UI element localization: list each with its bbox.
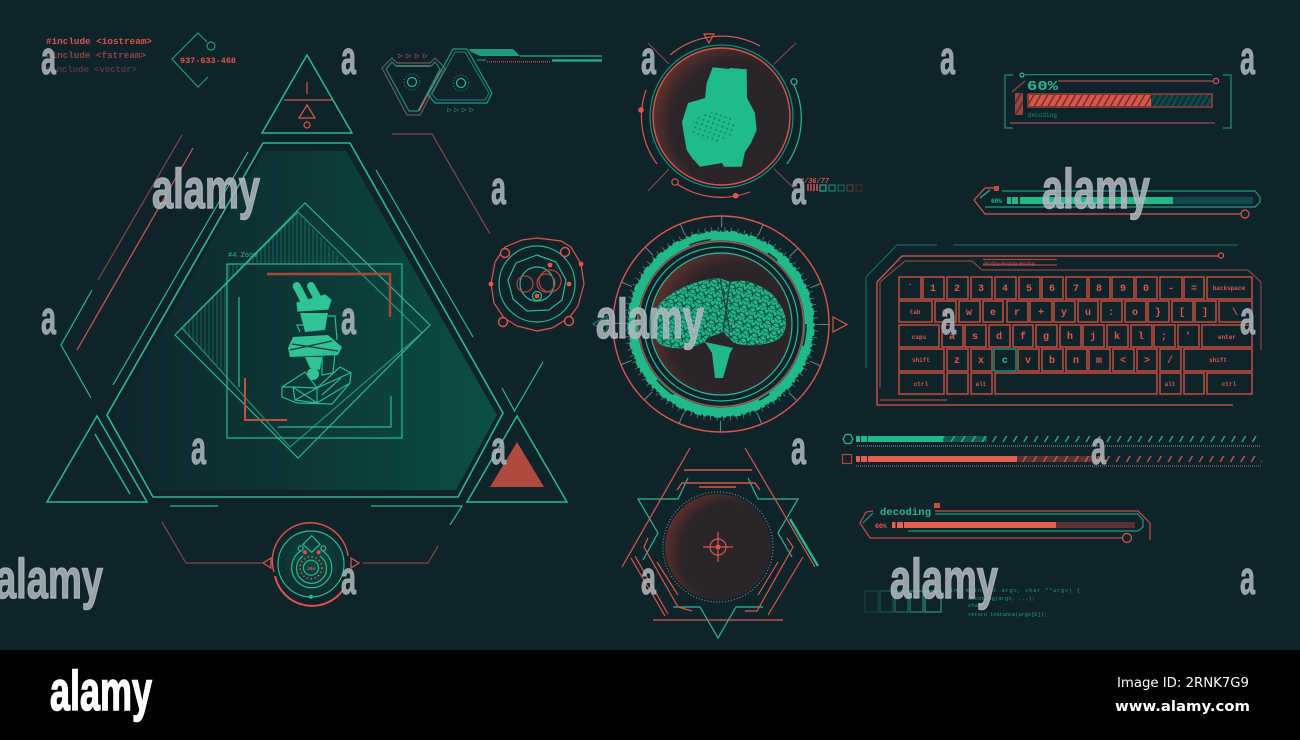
key legends: y [1061,308,1067,319]
key legends: < [1120,356,1126,367]
key legends: w [966,308,972,319]
panel: twin triangle badges [382,49,602,115]
badge left: ▷▷▷▷ [398,52,428,61]
corner brackets [239,274,391,427]
key legends: k [1114,331,1120,343]
key legends: shift [1209,357,1227,364]
tick marks [619,222,823,426]
watermark letters [41,31,1255,604]
decoding title: decoding [880,507,931,519]
footer bar [0,650,1300,740]
rings [499,246,575,322]
badge left [382,52,445,115]
key legends: 9 [1120,284,1126,295]
panel: orbit dial [489,238,584,331]
watermark words: alamy [1042,157,1150,220]
watermark letters: a [341,291,356,344]
stage [288,335,342,357]
key legends: ] [1202,307,1208,319]
key legends: alt [976,381,987,388]
target disc [665,494,771,600]
key legends: n [1073,356,1079,367]
key legends: e [990,308,996,319]
left chevron [61,290,92,398]
panel: diamond tag [172,33,236,87]
panel: green progress widget [974,186,1260,218]
caption: decoding [1028,112,1057,119]
percent: 60% [1027,79,1059,95]
panel: fading squares [865,591,941,612]
key legends: [ [1179,307,1185,319]
badge right: ▷▷▷▷ [447,106,474,115]
watermark letters: a [1240,291,1255,344]
watermark letters: a [41,291,56,344]
footer logo: alamy [50,659,152,722]
key legends: c [1002,356,1008,367]
key legends: = [1191,284,1197,295]
keyboard frame: decoding-decoding-decoding [983,261,1035,267]
parallel accent lines [113,152,473,525]
key legends: j [1090,331,1096,343]
key legends: l [1138,331,1144,343]
inner details [292,536,332,588]
panel: top brain-stem scan dial [638,34,862,198]
hatch block [1015,93,1023,115]
bar [1028,94,1212,107]
key legends: m [1096,356,1102,367]
watermark words [0,157,1150,610]
nodes [498,248,574,326]
rectangle frame [227,264,402,438]
panel: lower left triangle [47,416,147,502]
key legends: d [996,331,1002,343]
circuit lines [469,49,602,62]
overlapping orbits [517,270,561,292]
green accent [790,519,818,566]
diagonal ticks [648,43,796,191]
key legends: ctrl [914,381,929,388]
key legends: 2 [954,284,960,295]
key legends: - [1168,284,1174,295]
brain [653,278,786,378]
connector lines [162,522,438,563]
red accent lines [77,134,490,350]
key legends: / [1167,355,1173,367]
icon: microscope wireframe [282,286,351,404]
panel: bottom code text: return instance(argv[0]); [968,611,1047,618]
key legends: } [1155,307,1161,319]
watermark letters: a [191,421,206,474]
watermark words: alamy [596,287,704,350]
key legends: 3 [978,284,984,295]
watermark words: alamy [890,547,998,610]
panel: top right progress widget [1005,73,1231,128]
red triangle [490,442,544,487]
watermark letters: a [791,161,806,214]
triangle markers [284,82,332,128]
panel: large hexagon microscope display [61,134,503,525]
watermark letters: a [491,161,506,214]
image id: Image ID: 2RNK7G9 [1117,676,1249,691]
specimen silhouette [682,67,757,167]
panel: bottom circular gauge: 300 [307,566,315,572]
watermark letters: a [1091,421,1106,474]
key legends: 4 [1002,284,1008,295]
key legends: caps [912,334,927,341]
key legends: ctrl [1222,381,1237,388]
hexagon outline [107,143,503,497]
key legends: f [1020,331,1026,343]
key legends: ` [907,283,913,295]
panel: top-left code text: #include <iostream> [46,37,152,47]
watermark letters: a [341,31,356,84]
key legends: \ [1232,307,1238,319]
inner rings [638,242,804,406]
key legends: backspace [1213,285,1246,292]
panel: lower right triangle [467,362,567,502]
base [282,367,351,404]
side triangles [833,317,847,332]
key legends: ; [1161,332,1167,343]
key legends: > [1144,356,1150,367]
readout [800,178,862,191]
watermark letters: a [641,551,656,604]
panel: top triangle [262,55,352,133]
bar [1007,197,1253,204]
watermark letters: a [491,421,506,474]
key legends: g [1043,332,1049,343]
outer arcs [272,523,348,572]
tag number: 937-633-468 [180,57,236,66]
readout: 2/36/77 [800,178,830,186]
panel: top-left code text: #include <vector> [46,65,137,75]
head [297,295,331,311]
bar [892,522,1135,528]
key outlines [899,277,1252,394]
key legends: 5 [1026,284,1032,295]
key legends: b [1049,355,1055,367]
panel: bottom circular gauge [162,522,438,606]
keyboard frame [866,245,1261,405]
key legends: : [1108,308,1114,319]
watermark letters: a [941,291,956,344]
red hexagon lines [622,448,815,620]
panel: keyboard [866,245,1261,405]
panel: decoding progress widget [860,503,1150,542]
key legends: x [978,356,984,367]
watermark letters: a [341,551,356,604]
key legends: 6 [1049,284,1055,295]
frame [1005,75,1231,128]
hexagon fill [113,151,497,490]
key legends: enter [1218,334,1236,341]
key legends: shift [912,357,930,364]
teal star [638,478,798,638]
watermark letters: a [1240,31,1255,84]
red line [842,454,1262,466]
panel: top-left code text: #include <fstream> [46,51,146,61]
key legends: z [954,356,960,367]
panel: bottom code text: int main(int argc, char **argv) { [950,587,1080,594]
key legends: tab [910,309,921,316]
column and objective [305,357,322,370]
panel: top-left code text [46,37,152,75]
key legends: h [1067,331,1073,343]
watermark words: alamy [152,157,260,220]
watermark letters: a [940,31,955,84]
key legends: v [1025,356,1031,367]
key legends: 0 [1143,284,1149,295]
key legends: ' [1185,331,1191,343]
crosshair [703,532,733,562]
key legends: 7 [1073,284,1079,295]
cross lines [502,362,543,412]
highlighted key [994,349,1016,371]
percent: 60% [991,198,1002,205]
percent: 60% [875,523,887,530]
green rough ring [628,232,814,416]
body [300,313,328,332]
key legends: alt [1165,381,1176,388]
panel: bottom code text: decoding(argv, ...); [968,595,1035,602]
key legends: q [942,308,948,319]
website: www.alamy.com [1115,699,1250,715]
key legends: + [1038,308,1044,319]
key legends: a [949,332,955,343]
panel: bottom code text: char [968,602,981,609]
green line [843,434,1262,446]
panel: brain scan dial [593,216,847,432]
key legends: o [1132,308,1138,319]
zoom label: #4 Zoom [228,252,257,260]
watermark letters: a [41,31,56,84]
watermark letters: a [1240,551,1255,604]
key legends: r [1014,308,1020,319]
key legends: s [972,332,978,343]
panel: bottom code text [950,587,1080,618]
panel: hexagonal target [622,448,818,638]
watermark letters: a [641,31,656,84]
badge right [428,49,492,115]
key legends: 1 [930,284,936,295]
key legends [907,283,1246,388]
panel: hatched progress lines [842,434,1262,466]
outer arcs [638,34,801,198]
watermark letters: a [791,421,806,474]
disc [653,48,790,185]
key legends: 8 [1096,284,1102,295]
eyepieces [297,286,319,302]
rotated squares with hatching [175,203,430,458]
key legends: u [1085,308,1091,319]
